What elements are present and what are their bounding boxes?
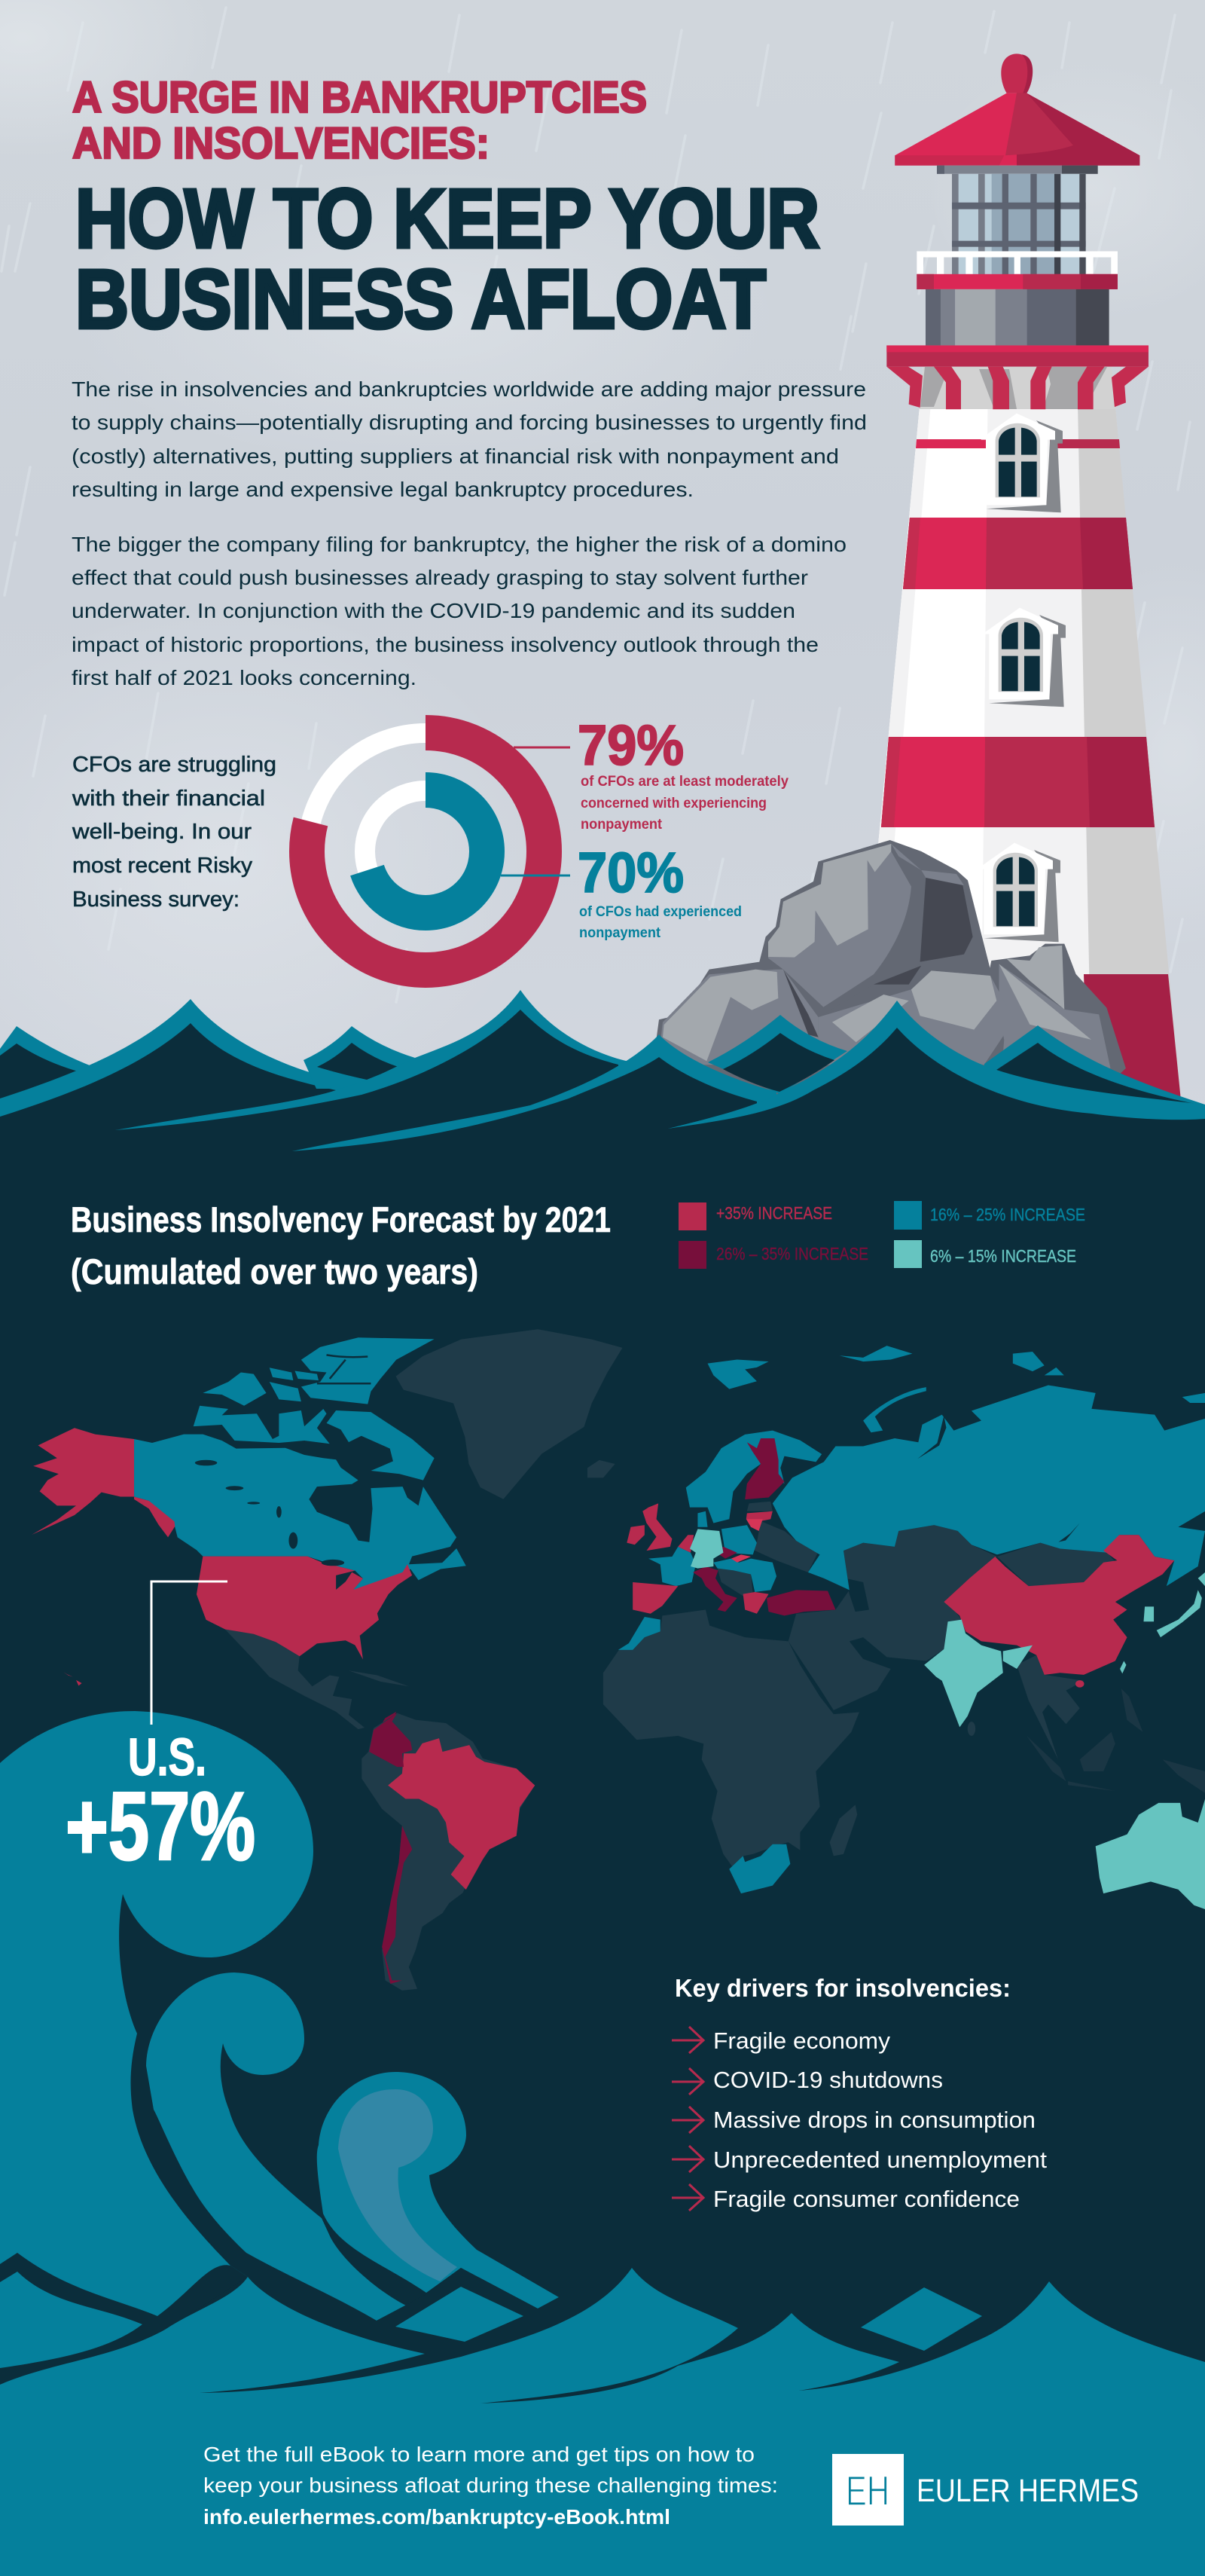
intro paragraph 2 xyxy=(72,533,847,689)
lighthouse gallery brackets xyxy=(886,345,1149,409)
driver items: Fragile consumer confidence xyxy=(713,2186,1020,2212)
U.S. leader line xyxy=(151,1581,227,1725)
key drivers heading: Key drivers for insolvencies: xyxy=(675,1974,1011,2002)
map: teal countries xyxy=(618,1346,1205,1893)
window 1 xyxy=(981,414,1063,512)
title: main: HOW TO KEEP YOUR xyxy=(75,173,819,265)
map: cyan countries xyxy=(690,1529,1205,1909)
stat: 70%: 70% xyxy=(578,841,684,904)
title: kicker: AND INSOLVENCIES: xyxy=(72,119,490,168)
intro paragraph 1: resulting in large and expensive legal bankruptcy procedures. xyxy=(72,478,694,501)
map heading: Business Insolvency Forecast by 2021 xyxy=(71,1199,611,1239)
wave curl 1 with U.S. callout xyxy=(0,1711,313,2411)
map: dark crimson countries xyxy=(693,1438,835,1615)
title xyxy=(72,73,819,346)
lighthouse finial and roof xyxy=(895,53,1139,174)
legend xyxy=(679,1201,1085,1269)
wave curl 3 highlight xyxy=(338,2089,457,2281)
driver items: Fragile economy xyxy=(713,2027,891,2054)
map heading xyxy=(71,1199,611,1291)
sky background xyxy=(0,0,1205,1145)
upper waves xyxy=(0,990,1205,1190)
lighthouse tower body xyxy=(855,367,1182,1115)
map: Asia unrated countries xyxy=(587,1460,1205,1856)
map: North America xyxy=(32,1337,466,1769)
rock: right outcrop xyxy=(961,944,1126,1115)
driver items: Unprecedented unemployment xyxy=(713,2147,1047,2173)
stat: 79%: concerned with experiencing xyxy=(581,796,767,811)
Euler Hermes logo: EULER HERMES xyxy=(917,2473,1139,2509)
intro paragraph 1: The rise in insolvencies and bankruptcies worldwide are adding major pressure xyxy=(72,377,866,401)
footer call to action: keep your business afloat during these challenging times: xyxy=(203,2474,778,2497)
stat: 79%: nonpayment xyxy=(581,817,663,833)
stat: 70%: nonpayment xyxy=(579,925,661,941)
wave curl 2 xyxy=(146,1972,406,2321)
stat: 70%: of CFOs had experienced xyxy=(579,904,742,920)
key drivers list xyxy=(672,1974,1047,2212)
title: main: BUSINESS AFLOAT xyxy=(75,253,766,346)
U.S. callout text: U.S. xyxy=(128,1728,206,1786)
driver items: Massive drops in consumption xyxy=(713,2107,1036,2133)
title: kicker: A SURGE IN BANKRUPTCIES xyxy=(72,73,647,122)
donut chart xyxy=(307,732,570,970)
stat: 79%: of CFOs are at least moderately xyxy=(581,774,789,790)
lighthouse xyxy=(855,53,1182,1115)
wave curl 3 xyxy=(317,2072,559,2309)
lighthouse drum and gallery xyxy=(917,274,1118,345)
map: Greenland xyxy=(396,1329,623,1499)
title: main xyxy=(75,173,819,346)
big wave curls xyxy=(0,1711,559,2411)
intro paragraph 2: first half of 2021 looks concerning. xyxy=(72,666,416,689)
CFO survey intro text: CFOs are struggling xyxy=(72,753,276,777)
footer call to action: Get the full eBook to learn more and get tips on how to xyxy=(203,2443,755,2466)
driver items xyxy=(713,2027,1047,2212)
CFO survey intro text xyxy=(72,753,276,912)
CFO survey intro text: with their financial xyxy=(72,787,265,811)
stat: 70% xyxy=(578,841,742,941)
intro paragraph 1 xyxy=(72,377,867,501)
map: crimson countries xyxy=(627,1503,1174,1688)
legend: +35% INCREASE xyxy=(716,1203,832,1223)
CFO survey intro text: well-being. In our xyxy=(72,820,252,844)
stat: 79% xyxy=(578,714,789,833)
map: South America xyxy=(362,1713,535,1991)
lower waves xyxy=(0,2253,1205,2576)
intro paragraph 2: The bigger the company filing for bankruptcy, the higher the risk of a domino xyxy=(72,533,847,556)
U.S. callout text xyxy=(66,1728,255,1881)
Euler Hermes logo xyxy=(832,2454,1139,2526)
footer call to action: info.eulerhermes.com/bankruptcy-eBook.html xyxy=(203,2505,670,2529)
map heading: (Cumulated over two years) xyxy=(71,1251,478,1291)
U.S. callout text: +57% xyxy=(66,1773,255,1881)
arrow icons xyxy=(672,2027,703,2211)
rock: main boulders xyxy=(648,840,1014,1102)
CFO survey intro text: Business survey: xyxy=(72,888,239,912)
CFO survey intro text: most recent Risky xyxy=(72,854,253,878)
intro paragraph 1: to supply chains—potentially disrupting and forcing businesses to urgently find xyxy=(72,411,867,434)
intro paragraph 2: impact of historic proportions, the business insolvency outlook through the xyxy=(72,633,819,656)
legend: 6% – 15% INCREASE xyxy=(930,1246,1076,1266)
Euler Hermes logo: EH xyxy=(846,2467,889,2514)
intro paragraph 2: effect that could push businesses already grasping to stay solvent further xyxy=(72,566,808,589)
title: kicker xyxy=(72,73,647,168)
driver items: COVID-19 shutdowns xyxy=(713,2067,943,2093)
map: Eurasia and Africa xyxy=(587,1346,1205,1909)
window 2 xyxy=(984,608,1066,707)
footer call to action xyxy=(203,2443,778,2529)
map: Africa xyxy=(603,1610,859,1868)
lighthouse lantern room xyxy=(917,174,1118,275)
intro paragraph 1: (costly) alternatives, putting suppliers at financial risk with nonpayment and xyxy=(72,445,839,468)
legend: 16% – 25% INCREASE xyxy=(930,1205,1085,1224)
intro paragraph 2: underwater. In conjunction with the COVID-19 pandemic and its sudden xyxy=(72,599,795,622)
legend: 26% – 35% INCREASE xyxy=(716,1244,868,1264)
window 3 xyxy=(979,843,1060,942)
stat: 79%: 79% xyxy=(578,714,684,777)
dark sea background xyxy=(0,1115,1205,2576)
